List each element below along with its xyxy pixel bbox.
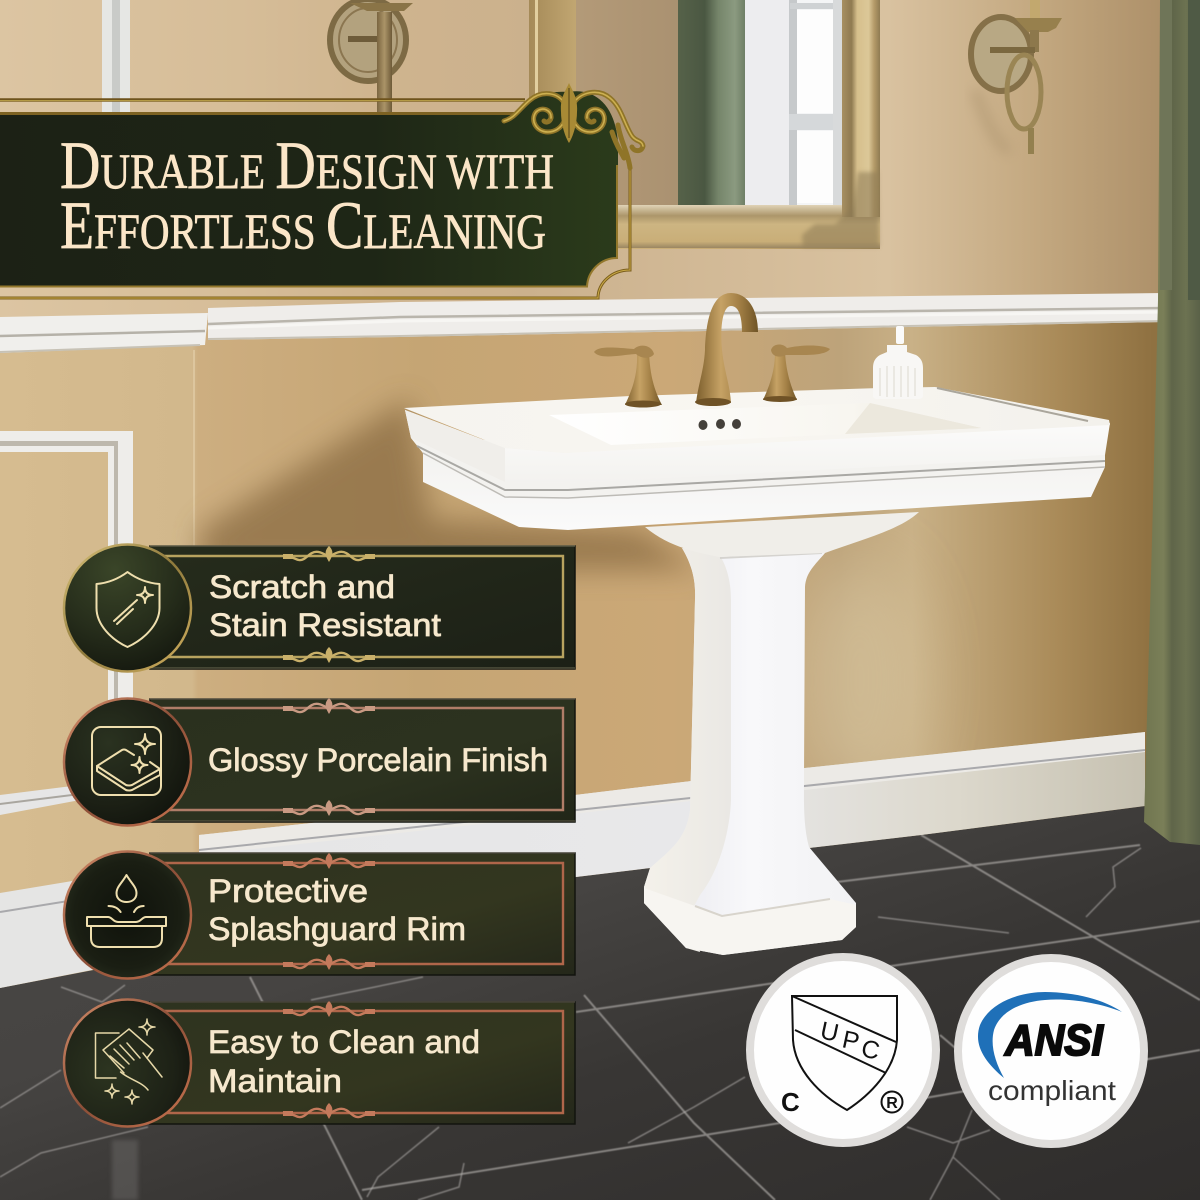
feature label: Stain Resistant bbox=[209, 607, 441, 643]
icon badge bbox=[64, 544, 191, 672]
faucet bbox=[695, 293, 758, 406]
certification badge: UPC: C bbox=[781, 1087, 800, 1117]
title text: DURABLE DESIGN WITH bbox=[60, 127, 554, 203]
bar panel bbox=[150, 699, 575, 822]
feature bar: glossy porcelain finish bbox=[64, 698, 575, 826]
floor: dark marble tiles bbox=[0, 800, 1200, 1200]
sconce: right bbox=[971, 0, 1062, 154]
pedestal column bbox=[644, 548, 856, 955]
certification badge: ANSI: compliant bbox=[988, 1075, 1116, 1106]
basin lip bbox=[405, 410, 1110, 483]
feature label: Easy to Clean and bbox=[208, 1024, 480, 1060]
bar panel bbox=[150, 1002, 575, 1124]
banner panel bbox=[0, 91, 618, 287]
icon: shield with sparkle bbox=[96, 572, 160, 647]
icon badge bbox=[64, 1000, 191, 1126]
bar ornament: bottom bbox=[283, 647, 375, 663]
curtain bbox=[1144, 0, 1200, 845]
UPC shield bbox=[792, 996, 897, 1110]
bar ornament: bottom bbox=[283, 800, 375, 816]
bar ornament: top bbox=[283, 853, 375, 869]
bar panel bbox=[150, 853, 575, 975]
feature bar: easy to clean and maintain bbox=[64, 1000, 575, 1126]
icon: water drop over basin bbox=[87, 875, 166, 947]
faucet handle: right bbox=[763, 344, 830, 402]
background: bathroom wall bbox=[0, 0, 1200, 960]
feature label: Scratch and bbox=[209, 569, 395, 605]
wall panel moulding bbox=[0, 0, 133, 815]
soap bottle bbox=[873, 326, 923, 399]
bowl underside bbox=[645, 512, 919, 557]
bar panel bbox=[150, 546, 575, 669]
bar ornament: bottom bbox=[283, 954, 375, 970]
title text: EFFORTLESS CLEANING bbox=[60, 187, 546, 263]
feature bar: scratch and stain resistant bbox=[64, 544, 575, 672]
certification badge: UPC bbox=[750, 957, 936, 1143]
feature bar: protective splashguard rim bbox=[64, 852, 575, 978]
bar ornament: top bbox=[283, 546, 375, 562]
basin body bbox=[411, 438, 1105, 530]
bar ornament: bottom bbox=[283, 1103, 375, 1119]
baseboard bbox=[0, 732, 1145, 988]
chair rail moulding bbox=[0, 293, 1165, 353]
certification badge: UPC: P bbox=[840, 1025, 862, 1056]
icon: hand wiping with cloth bbox=[96, 1019, 162, 1104]
basin well bbox=[549, 403, 981, 445]
certification badge: UPC: U bbox=[818, 1016, 841, 1048]
title text bbox=[60, 127, 554, 263]
pedestal sink bbox=[404, 293, 1110, 955]
certification badge: UPC: C bbox=[859, 1034, 882, 1066]
title banner bbox=[0, 83, 643, 298]
certification badge: UPC: R bbox=[886, 1095, 898, 1112]
basin deck bbox=[404, 387, 1110, 453]
icon badge bbox=[64, 852, 191, 978]
mirror with gold frame bbox=[529, 0, 880, 249]
ANSI swoosh bbox=[978, 992, 1122, 1078]
feature label: Protective bbox=[208, 873, 368, 909]
faucet handle: left bbox=[594, 346, 662, 408]
certification badge: ANSI: ANSI bbox=[1004, 1016, 1104, 1065]
certification badge: ANSI bbox=[958, 958, 1144, 1144]
icon: porcelain tile bbox=[92, 727, 161, 795]
feature label: Glossy Porcelain Finish bbox=[208, 742, 548, 778]
feature label: Splashguard Rim bbox=[208, 911, 466, 947]
banner corner ornament bbox=[504, 83, 643, 168]
bar ornament: top bbox=[283, 1001, 375, 1017]
sconce: left bbox=[330, 0, 413, 116]
banner gold rules bbox=[0, 100, 630, 298]
feature label: Maintain bbox=[208, 1063, 342, 1099]
drain holes bbox=[698, 419, 741, 430]
bar ornament: top bbox=[283, 698, 375, 714]
icon badge bbox=[64, 698, 191, 826]
